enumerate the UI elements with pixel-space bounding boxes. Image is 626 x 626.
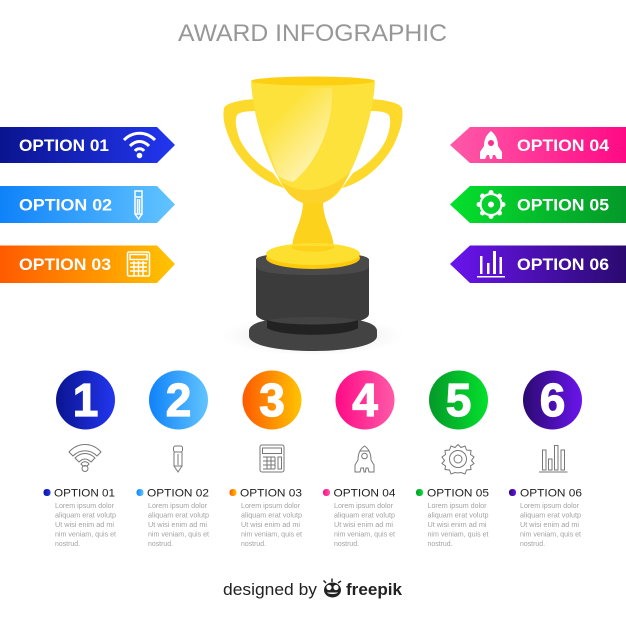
icon: pencil [135,191,142,219]
text block: option 03: nim veniam, quis et [241,532,302,538]
text block: option 05: Lorem ipsum dolor [428,503,487,510]
number badge 4: 4 [352,374,378,426]
text block: option 01: Ut wisi enim ad mi [55,522,114,529]
number badge 3 [242,370,302,430]
trophy illustration [221,76,405,356]
text block: option 05: nim veniam, quis et [428,532,489,538]
number badge 2 [149,370,208,430]
banner: option 03 [0,246,175,283]
icon: wifi [124,133,155,158]
text block: option 04: OPTION 04 [334,488,396,500]
banner: option 01 [0,127,175,163]
trophy handles [223,99,403,188]
text block: option 03 [230,488,302,548]
trophy stem [292,201,334,250]
trophy cup [251,82,375,203]
text block: option 02: Lorem ipsum dolor [148,503,208,510]
number badge 6: 6 [540,374,565,426]
text block: option 02 [136,488,209,548]
number badge 1: 1 [73,374,98,426]
text block: option 01: aliquam erat volutp [55,512,116,520]
footer credit: freepik [346,580,403,599]
text block: option 05 [416,488,489,548]
cup lower band [280,172,350,203]
banner: option 02: OPTION 02 [19,196,112,214]
number badge 5: 5 [446,374,471,426]
text block: option 04 [323,488,396,548]
number badge 1 [56,370,115,430]
text block: option 01: nim veniam, quis et [55,532,116,538]
text block: option 02: nim veniam, quis et [148,532,209,538]
banner: option 04 [450,127,626,163]
cup highlight [256,87,332,182]
text block: option 03: Lorem ipsum dolor [241,503,301,510]
icon: rocket [480,131,502,159]
text block: option 06: OPTION 06 [520,488,582,500]
text block: option 02: aliquam erat volutp [148,512,209,520]
trophy ground shadow [221,316,405,356]
number badge 3: 3 [259,374,285,426]
text block: option 03: OPTION 03 [240,488,302,500]
outline icon: pencil [174,446,182,472]
text block: option 03: aliquam erat volutp [241,512,302,520]
text block: option 05: OPTION 05 [427,488,489,500]
bottom plate [249,317,377,351]
icon: freepik logo [324,578,341,598]
text block: option 05: nostrud. [428,541,453,548]
footer credit [223,578,403,599]
text block: option 06: Ut wisi enim ad mi [520,522,579,529]
outline icon: bar chart [539,446,568,472]
text block: option 04: nostrud. [334,541,359,548]
banner: option 04: OPTION 04 [517,136,610,155]
outline icon: rocket [355,446,374,472]
outline icon: wifi [69,444,101,472]
outline icon: gear [442,444,474,474]
text block: option 06: nim veniam, quis et [520,532,581,538]
footer credit: designed by [223,580,318,599]
icon: bar chart [477,251,505,278]
text block: option 01 [44,488,116,548]
text block: option 01: nostrud. [55,541,80,548]
icon: calculator [128,252,150,276]
text block: option 06: nostrud. [520,541,545,548]
number badge 5 [429,370,488,430]
black base [256,253,369,326]
text block: option 04: aliquam erat volutp [334,512,395,520]
text block: option 02: OPTION 02 [147,488,209,500]
text block: option 06: aliquam erat volutp [520,512,581,520]
text block: option 04: Lorem ipsum dolor [334,503,394,510]
text block: option 02: nostrud. [148,541,173,548]
number badge 4 [336,370,394,430]
banner: option 05 [450,186,626,223]
cup rim [251,76,375,86]
number badge 6 [523,370,582,430]
text block: option 04: Ut wisi enim ad mi [334,522,393,529]
banner: option 02 [0,186,175,223]
text block: option 04: nim veniam, quis et [334,532,395,538]
text block: option 01: Lorem ipsum dolor [55,503,115,510]
banner: option 01: OPTION 01 [19,136,109,155]
text block: option 03: nostrud. [241,541,266,548]
text block: option 05: aliquam erat volutp [428,512,489,520]
outline icon: calculator [260,445,284,472]
icon: gear [476,190,506,219]
text block: option 06 [509,488,582,548]
text block: option 03: Ut wisi enim ad mi [241,522,300,529]
text block: option 02: Ut wisi enim ad mi [148,522,207,529]
text block: option 01: OPTION 01 [54,488,115,500]
banner: option 05: OPTION 05 [517,196,609,214]
banner: option 06: OPTION 06 [517,255,609,274]
text block: option 06: Lorem ipsum dolor [520,503,580,510]
text block: option 05: Ut wisi enim ad mi [428,522,487,529]
banner: option 03: OPTION 03 [19,255,111,274]
gold plate [266,243,360,269]
number badge 2: 2 [166,374,191,426]
title: AWARD INFOGRAPHIC [178,20,447,47]
banner: option 06 [450,246,626,283]
